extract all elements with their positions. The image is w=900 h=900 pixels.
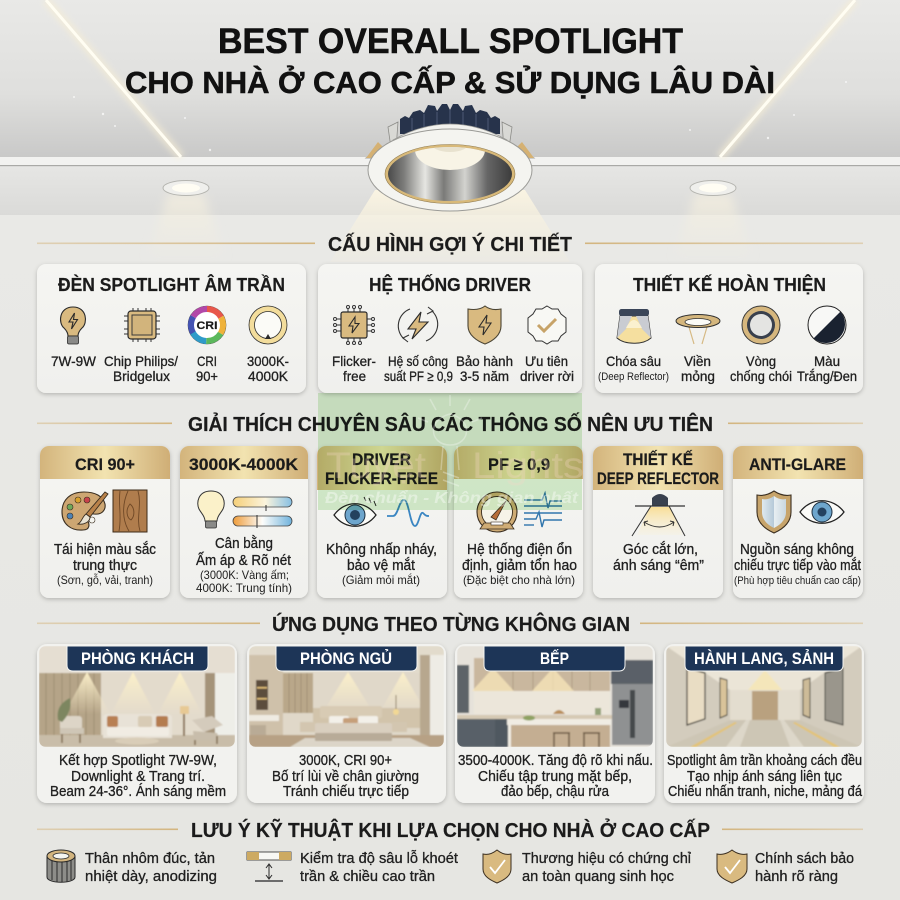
body text: trung thực bbox=[73, 558, 137, 574]
body text: (Đặc biệt cho nhà lớn) bbox=[463, 573, 575, 587]
labels: 3-5 năm bbox=[460, 368, 509, 384]
body text: Không nhấp nháy, bbox=[326, 542, 437, 558]
header bbox=[317, 446, 447, 490]
body text: định, giảm tổn hao bbox=[462, 558, 577, 574]
text: Chính sách bảo bbox=[755, 850, 854, 867]
tab: label bbox=[685, 646, 843, 671]
text: hành rõ ràng bbox=[755, 868, 838, 885]
title bbox=[125, 22, 775, 100]
labels: Bridgelux bbox=[113, 368, 170, 384]
text: an toàn quang sinh học bbox=[522, 868, 674, 885]
caption: Downlight & Trang trí. bbox=[71, 769, 205, 785]
card: living room bbox=[37, 644, 237, 803]
labels: mỏng bbox=[681, 368, 715, 384]
labels: Viền bbox=[684, 353, 711, 369]
title: BEST OVERALL SPOTLIGHT bbox=[218, 22, 683, 61]
icon: warm bulb bbox=[198, 491, 224, 528]
header text: 3000K-4000K bbox=[189, 455, 299, 474]
body text: Nguồn sáng không bbox=[740, 542, 854, 558]
tab: label: PHÒNG KHÁCH bbox=[81, 649, 194, 668]
panel heading: HỆ THỐNG DRIVER bbox=[369, 274, 531, 295]
body text: 4000K: Trung tính) bbox=[196, 581, 292, 595]
note: die-cast aluminium body bbox=[47, 850, 217, 885]
panel heading: ĐÈN SPOTLIGHT ÂM TRẦN bbox=[58, 274, 285, 295]
watermark bbox=[318, 393, 584, 510]
header bbox=[454, 446, 583, 479]
icon: CRI ring bbox=[188, 306, 226, 344]
note: warranty policy bbox=[717, 850, 854, 885]
icon: cut-off angle bbox=[632, 494, 685, 536]
body text: ánh sáng “êm” bbox=[613, 558, 704, 574]
caption: 3500-4000K. Tăng độ rõ khi nấu. bbox=[458, 753, 653, 769]
panel: recessed spotlight bbox=[37, 264, 306, 393]
body text: (Phù hợp tiêu chuẩn cao cấp) bbox=[734, 575, 861, 587]
watermark: Tuyệt bbox=[326, 445, 427, 486]
icon: wave bbox=[387, 500, 429, 526]
text bbox=[300, 850, 459, 885]
header text: DRIVER bbox=[352, 450, 411, 469]
caption bbox=[272, 753, 419, 800]
header text: CRI 90+ bbox=[75, 455, 135, 474]
header bbox=[180, 446, 308, 479]
panel: driver system bbox=[318, 264, 582, 393]
labels: 4000K bbox=[248, 368, 289, 384]
tab: label: BẾP bbox=[540, 649, 569, 668]
photo: living room bbox=[39, 646, 235, 747]
icon: thin rim bbox=[676, 314, 720, 344]
icon: cut-out bbox=[247, 852, 291, 881]
icon: eye bbox=[800, 501, 844, 523]
icon: wood bbox=[113, 490, 147, 532]
text: Kiểm tra độ sâu lỗ khoét bbox=[300, 850, 459, 867]
body text bbox=[326, 542, 437, 587]
header text: PF ≥ 0,9 bbox=[488, 455, 550, 474]
caption: Beam 24-36°. Ánh sáng mềm bbox=[50, 783, 226, 800]
note: photobiological safety bbox=[483, 850, 692, 885]
header text: DEEP REFLECTOR bbox=[597, 469, 719, 488]
labels: 7W-9W bbox=[51, 353, 97, 369]
section heading: technical notes: LƯU Ý KỸ THUẬT KHI LỰA CHỌN CHO NHÀ Ở CAO CẤP bbox=[191, 818, 710, 842]
icon: heatsink bbox=[47, 850, 75, 882]
icon: warranty shield bbox=[468, 306, 501, 344]
tab: label: PHÒNG NGỦ bbox=[300, 649, 392, 668]
labels: free bbox=[343, 368, 366, 384]
header bbox=[733, 446, 863, 479]
header text: FLICKER-FREE bbox=[325, 469, 438, 488]
body text bbox=[734, 542, 861, 587]
caption bbox=[458, 753, 653, 800]
icon: ceiling downlight right bbox=[690, 180, 736, 196]
body text: Ấm áp & Rõ nét bbox=[196, 552, 291, 569]
labels bbox=[51, 353, 289, 384]
body text bbox=[196, 535, 292, 595]
labels: Bảo hành bbox=[456, 353, 513, 369]
labels: 90+ bbox=[196, 368, 218, 384]
caption: Chiếu nhấn tranh, niche, mảng đá bbox=[668, 784, 863, 800]
tab: label bbox=[67, 646, 208, 671]
card: bedroom bbox=[247, 644, 446, 803]
caption: Chiếu tập trung mặt bếp, bbox=[478, 769, 632, 785]
watermark: Lights bbox=[472, 445, 584, 486]
card: kitchen bbox=[455, 644, 655, 803]
icon: palette bbox=[62, 492, 108, 530]
tab: label bbox=[484, 646, 625, 671]
icon: shield check bbox=[483, 850, 511, 883]
caption: Spotlight âm trần khoảng cách đều bbox=[667, 753, 862, 769]
icon: power factor bolt bbox=[398, 307, 438, 342]
caption: Kết hợp Spotlight 7W-9W, bbox=[59, 753, 217, 769]
icon: eye bbox=[334, 497, 376, 526]
body text bbox=[54, 541, 156, 587]
labels: Flicker- bbox=[332, 353, 376, 369]
icon: anti-glare ring bbox=[742, 306, 780, 344]
watermark: Đèn chuẩn - Không gian nhất bbox=[325, 489, 579, 507]
section heading: applications: ỨNG DỤNG THEO TỪNG KHÔNG GIAN bbox=[272, 612, 630, 636]
body text: chiếu trực tiếp vào mắt bbox=[734, 557, 861, 574]
text: nhiệt dày, anodizing bbox=[85, 868, 217, 885]
header text: ANTI-GLARE bbox=[749, 455, 846, 474]
labels: Trắng/Đen bbox=[797, 368, 857, 384]
caption bbox=[50, 753, 226, 800]
header text bbox=[597, 450, 719, 488]
labels: CRI bbox=[197, 353, 217, 369]
text: Thân nhôm đúc, tản bbox=[85, 850, 215, 867]
icon: driver badge bbox=[528, 306, 566, 344]
labels: Chóa sâu bbox=[606, 353, 661, 369]
photo: hallway bbox=[666, 646, 862, 747]
text bbox=[522, 850, 692, 885]
caption: Bố trí lùi về chân giường bbox=[272, 769, 419, 785]
icon: temperature bars bbox=[233, 497, 292, 528]
body text bbox=[462, 542, 577, 587]
card: CRI 90+ bbox=[40, 446, 170, 598]
labels: Vòng bbox=[746, 353, 776, 369]
section heading: configuration: CẤU HÌNH GỢI Ý CHI TIẾT bbox=[328, 232, 572, 256]
note: ceiling cut-out depth bbox=[247, 850, 459, 885]
header bbox=[40, 446, 170, 479]
labels: 3000K- bbox=[247, 353, 289, 369]
body text: (Giảm mỏi mắt) bbox=[342, 572, 420, 587]
labels: driver rời bbox=[520, 368, 574, 384]
icon: white or black colour bbox=[808, 306, 846, 344]
icon: bulb 7W-9W bbox=[61, 307, 85, 344]
body text bbox=[613, 541, 704, 574]
labels bbox=[598, 353, 857, 384]
body text: Góc cắt lớn, bbox=[623, 541, 698, 558]
card: 3000K-4000K bbox=[180, 446, 308, 598]
labels: Hệ số công bbox=[388, 353, 448, 369]
body text: Hệ thống điện ổn bbox=[467, 542, 572, 558]
panel heading: THIẾT KẾ HOÀN THIỆN bbox=[633, 274, 826, 295]
card: deep reflector bbox=[593, 446, 723, 598]
icon: gauge bbox=[477, 492, 517, 532]
section heading: parameters: GIẢI THÍCH CHUYÊN SÂU CÁC THÔNG SỐ NÊN ƯU TIÊN bbox=[188, 412, 713, 436]
text bbox=[755, 850, 854, 885]
text bbox=[85, 850, 217, 885]
labels bbox=[332, 353, 574, 384]
caption: đảo bếp, chậu rửa bbox=[501, 784, 610, 800]
icon: chip bbox=[124, 308, 160, 342]
icon: flicker-free chip bbox=[334, 306, 374, 344]
icon: stable power lines bbox=[524, 493, 562, 527]
spotlight product illustration bbox=[366, 104, 534, 211]
photo: bedroom bbox=[249, 646, 444, 747]
body text: bảo vệ mắt bbox=[347, 557, 415, 574]
header bbox=[593, 446, 723, 490]
labels: Ưu tiên bbox=[525, 353, 568, 369]
icon: CRI ring: CRI bbox=[196, 320, 218, 332]
body text: Tái hiện màu sắc bbox=[54, 541, 156, 558]
icon: colour temperature ring bbox=[249, 306, 287, 344]
body text: Cân bằng bbox=[215, 535, 273, 552]
labels: chống chói bbox=[730, 368, 792, 384]
tab: label: HÀNH LANG, SẢNH bbox=[694, 649, 834, 668]
title: CHO NHÀ Ở CAO CẤP & SỬ DỤNG LÂU DÀI bbox=[125, 64, 775, 100]
caption: 3000K, CRI 90+ bbox=[299, 753, 392, 769]
header text: THIẾT KẾ bbox=[623, 450, 693, 469]
text: Thương hiệu có chứng chỉ bbox=[522, 850, 692, 867]
body text: (3000K: Vàng ấm; bbox=[200, 568, 289, 582]
card: hallway bbox=[664, 644, 864, 803]
body text: (Sơn, gỗ, vải, tranh) bbox=[57, 572, 153, 587]
icon: shield check bbox=[717, 850, 747, 883]
icon: deep reflector bbox=[617, 309, 651, 343]
tab: label bbox=[276, 646, 417, 671]
labels: (Deep Reflector) bbox=[598, 371, 669, 383]
labels: suất PF ≥ 0,9 bbox=[384, 368, 453, 384]
caption: Tránh chiếu trực tiếp bbox=[283, 784, 409, 800]
card: anti-glare bbox=[733, 446, 863, 598]
caption bbox=[667, 753, 863, 800]
labels: Màu bbox=[814, 353, 840, 369]
card: driver flicker-free bbox=[317, 446, 447, 598]
icon: ceiling downlight left bbox=[163, 180, 209, 196]
card: PF bbox=[454, 446, 583, 598]
text: trần & chiều cao trần bbox=[300, 868, 435, 885]
icon: shield bbox=[757, 491, 791, 533]
header text bbox=[325, 450, 438, 488]
photo: kitchen bbox=[457, 646, 653, 747]
labels: Chip Philips/ bbox=[104, 353, 178, 369]
caption: Tạo nhịp ánh sáng liên tục bbox=[687, 769, 842, 785]
panel: finishing design bbox=[595, 264, 863, 393]
